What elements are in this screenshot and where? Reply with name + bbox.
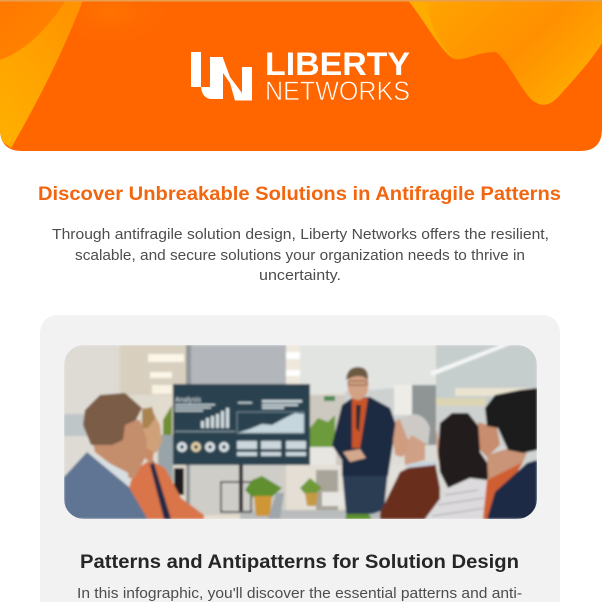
section body text: In this infographic, you'll discover the essential patterns and anti- [77, 586, 522, 602]
intro paragraph [52, 227, 549, 284]
background plant behind men [163, 405, 172, 435]
section heading: Patterns and Antipatterns for Solution Design [80, 552, 519, 573]
person: standing presenter [332, 367, 396, 514]
bar chart [201, 408, 229, 428]
panel: content card [40, 315, 560, 602]
left ribbon [0, 0, 83, 148]
wall display [173, 384, 310, 465]
ceiling and lights [120, 345, 190, 395]
logo wordmark: LIBERTY: LIBERTY [265, 46, 410, 82]
display heading: Analysis [175, 397, 202, 404]
small plant [300, 478, 322, 506]
table [239, 509, 382, 519]
person: orange-shirted man [127, 407, 204, 519]
display stand [239, 465, 243, 511]
intro paragraph: scalable, and secure solutions your organization needs to thrive in [75, 248, 525, 264]
person: right foreground with dark hair [478, 388, 537, 519]
photo: team meeting around a display [64, 345, 537, 519]
person: grey-haired man [380, 414, 440, 519]
logo mark [191, 52, 252, 100]
green plant background [310, 415, 335, 447]
main heading: Discover Unbreakable Solutions in Antifragile Patterns [38, 184, 561, 205]
foreground plant [344, 512, 372, 519]
logo [191, 52, 410, 100]
plant on table [245, 476, 282, 516]
back office right [344, 388, 484, 435]
exit sign [324, 396, 335, 401]
grey panel behind seated men [158, 435, 173, 485]
intro paragraph: Through antifragile solution design, Liberty Networks offers the resilient, [52, 227, 549, 243]
person: man in blue jacket [64, 393, 147, 519]
header banner [0, 0, 602, 151]
logo wordmark: NETWORKS: NETWORKS [265, 76, 410, 106]
area chart [237, 413, 304, 433]
person: woman with dark curly hair [425, 413, 492, 519]
dark bag [174, 468, 184, 495]
grey column [190, 345, 287, 386]
intro paragraph: uncertainty. [259, 268, 341, 284]
right wave [408, 0, 602, 105]
donut charts [178, 444, 228, 450]
